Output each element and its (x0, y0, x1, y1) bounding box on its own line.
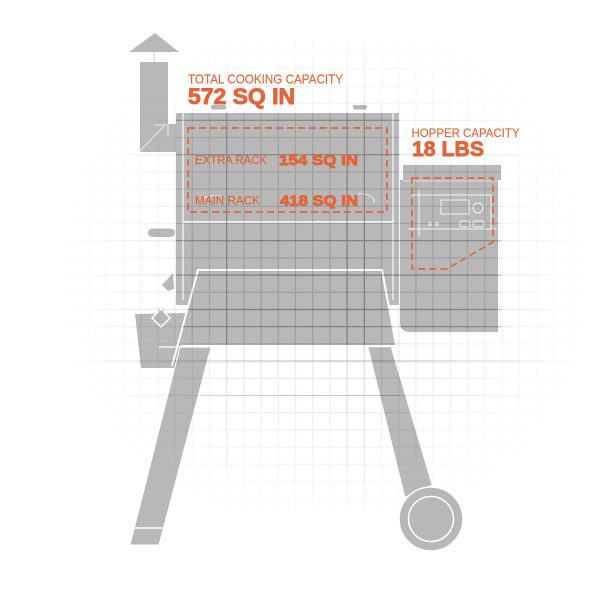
leg frame (159, 270, 397, 366)
heading: total cooking capacity (188, 72, 344, 109)
label: extra rack: 154 SQ IN (279, 152, 358, 169)
heading: hopper capacity (412, 126, 520, 161)
icon: chimney stack (140, 62, 176, 152)
right leg (368, 347, 432, 497)
label: extra rack: EXTRA RACK (195, 153, 267, 167)
grid lines strengthened over the grill (176, 113, 501, 345)
grill body (176, 113, 400, 305)
icon: side bracket (162, 273, 174, 291)
hopper box (400, 165, 501, 332)
pellet bucket (135, 307, 187, 368)
heading: total cooking capacity: TOTAL COOKING CAPACITY (188, 72, 344, 86)
measurement grid overlay (88, 46, 555, 504)
heading: total cooking capacity: 572 SQ IN (188, 84, 295, 109)
label: extra rack (195, 152, 358, 169)
label: main rack (195, 192, 358, 210)
left leg (130, 347, 211, 545)
label: main rack: MAIN RACK (195, 194, 260, 208)
control panel (408, 190, 497, 237)
infographic: pellet grill capacity diagram (88, 33, 555, 550)
label: main rack: 418 SQ IN (280, 192, 358, 210)
wheel (399, 487, 463, 551)
grill illustration (129, 33, 501, 551)
grid lines across the white page (88, 46, 555, 504)
heading: hopper capacity: 18 LBS (412, 138, 484, 161)
icon: side handle (148, 228, 175, 237)
heading: hopper capacity: HOPPER CAPACITY (412, 126, 520, 140)
icon: chimney cap (129, 33, 179, 62)
dashed outline: hopper (412, 178, 493, 269)
icon: lid handles (211, 105, 367, 110)
dashed outline: cooking racks (188, 128, 387, 212)
